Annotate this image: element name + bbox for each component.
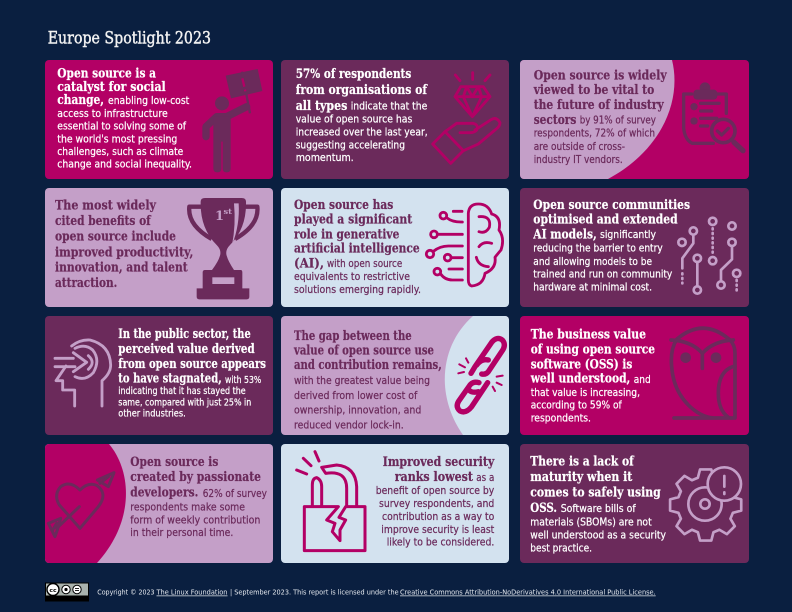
text block (296, 66, 428, 164)
text block: attraction. (55, 275, 117, 290)
icon: Creative Commons badge: cc (49, 588, 57, 594)
text block: Open source is a (57, 66, 156, 81)
panel background (281, 444, 509, 563)
text block: In the public sector, the (118, 326, 251, 341)
panel: contribution gap (281, 316, 509, 435)
text block: change and social inequality. (57, 159, 192, 171)
text block: with the greatest value being (294, 375, 430, 387)
text block (530, 326, 655, 424)
icon: gear with warning (670, 467, 741, 541)
text block: ranks lowest (395, 469, 473, 484)
text block: in their personal time. (130, 527, 233, 539)
text block: software (OSS) is (531, 356, 632, 371)
text block: to have stagnated, (118, 371, 222, 386)
title: Europe Spotlight 2023 (48, 28, 211, 48)
text block: derived from lower cost of (294, 390, 418, 402)
text block: indicate that the (351, 101, 427, 113)
text block: catalyst for social (57, 79, 166, 94)
text block: the world's most pressing (57, 134, 177, 146)
text block: contribution as a way to (382, 511, 494, 523)
panel background (45, 316, 273, 435)
text block (55, 197, 193, 290)
text block: optimised and extended (533, 212, 678, 227)
text block: change, (57, 92, 104, 107)
text block: cited benefits of (55, 213, 152, 228)
text block: essential to solving some of (57, 121, 186, 133)
icon: circuit traces (678, 218, 740, 294)
text block: from open source appears (118, 356, 266, 371)
text block: access to infrastructure (57, 108, 168, 120)
text block: The business value (531, 326, 646, 341)
text block: value of open source has (296, 114, 412, 126)
text block: There is a lack of (530, 454, 635, 469)
text block: Software bills of (561, 503, 636, 515)
copyright text: The Linux Foundation (156, 588, 228, 596)
text block: AI models, (532, 226, 597, 241)
icon: broken chain (457, 338, 504, 412)
text block: Open source is widely (534, 67, 667, 82)
text block: viewed to be vital to (533, 82, 654, 97)
text block: ownership, innovation, and (294, 405, 421, 417)
icon: owl (671, 328, 735, 418)
text block: as a (476, 472, 494, 484)
text block: reducing the barrier to entry (533, 243, 663, 255)
text block: sectors (534, 112, 576, 127)
icon: hand holding diamond (433, 73, 500, 163)
text block: well understood, (530, 371, 630, 386)
panel background (45, 188, 273, 307)
text block: form of weekly contribution (130, 514, 260, 526)
text block: industry IT vendors. (534, 154, 623, 166)
icon: trophy (189, 198, 257, 299)
panel: generative AI (281, 188, 509, 307)
panel background (45, 60, 273, 179)
text block: with 53% (225, 375, 261, 386)
panel: passionate developers (45, 444, 273, 563)
panel: social change (45, 60, 273, 179)
text block: from organisations of (296, 82, 428, 97)
footer (45, 582, 656, 602)
text block: artificial intelligence (294, 241, 420, 256)
text block: Open source has (294, 197, 393, 212)
icon: clipboard and magnifier (684, 84, 743, 151)
text block: respondents. (531, 412, 591, 424)
text block (533, 67, 667, 166)
text block: Improved security (383, 454, 495, 469)
text block (294, 197, 421, 296)
text block: momentum. (296, 152, 354, 164)
text block (530, 454, 666, 555)
text block: equivalents to restrictive (294, 271, 410, 283)
text block: hardware at minimal cost. (533, 282, 652, 294)
panel background (45, 444, 273, 563)
text block: innovation, and talent (55, 260, 188, 275)
text block: materials (SBOMs) are not (530, 517, 652, 529)
text block: other industries. (118, 409, 186, 420)
text block: and contribution remains, (294, 357, 442, 372)
text block: benefit of open source by (376, 485, 494, 497)
text block (376, 454, 495, 549)
icon: trophy: 1 (215, 209, 224, 224)
text block: of using open source (531, 341, 655, 356)
panel background (281, 60, 509, 179)
text block: best practice. (530, 543, 592, 555)
text block: survey respondents, and (379, 498, 494, 510)
panel background (520, 444, 749, 563)
icon: trophy: st (224, 207, 233, 216)
text block: 57% of respondents (296, 66, 411, 81)
text block: open source include (55, 228, 176, 243)
text block (57, 66, 192, 171)
panel background (520, 60, 749, 179)
icon: circuit brain (426, 204, 503, 286)
panel background (520, 316, 749, 435)
panel: business value (520, 316, 749, 435)
panel: most widely cited benefits (45, 188, 273, 307)
panel background (281, 316, 509, 435)
text block: The gap between the (294, 328, 412, 343)
text block: are outside of cross- (534, 141, 625, 153)
copyright text (97, 588, 656, 596)
text block: with open source (327, 258, 402, 270)
text block: well understood as a security (530, 530, 666, 542)
icon: head with target (55, 340, 111, 406)
icon: protester with sign (206, 69, 262, 172)
text block: increased over the last year, (296, 127, 428, 139)
text block: created by passionate (130, 469, 261, 484)
text block: indicating that it has stayed the (118, 386, 246, 397)
text block (130, 454, 267, 539)
text block: suggesting accelerating (296, 139, 405, 151)
icon: broken padlock (297, 452, 365, 551)
text block: trained and run on community (533, 269, 672, 281)
text block: 62% of survey (203, 488, 267, 500)
text block: respondents, 72% of which (534, 128, 655, 140)
magenta curved area (45, 444, 126, 563)
text block: Open source is (130, 454, 218, 469)
text block: perceived value derived (118, 341, 255, 356)
panel: improved security (281, 444, 509, 563)
text block: maturity when it (530, 469, 632, 484)
text block: Open source communities (533, 197, 690, 212)
text block: the future of industry (534, 97, 664, 112)
text block: developers. (130, 485, 198, 500)
copyright text: Copyright © 2023 (97, 588, 154, 596)
copyright text: | September 2023. This report is licensed under the (230, 588, 399, 596)
text block: respondents make some (130, 501, 245, 513)
text block: improve security is least (381, 524, 494, 536)
panel: lack of maturity (520, 444, 749, 563)
lilac curved area (520, 60, 674, 179)
text block: that value is increasing, (531, 387, 640, 399)
text block: likely to be considered. (387, 537, 494, 549)
text block (532, 197, 690, 294)
text block: The most widely (55, 197, 157, 212)
text block: solutions emerging rapidly. (294, 284, 421, 296)
text block (293, 328, 442, 432)
text block: challenges, such as climate (57, 146, 183, 158)
text block: and (634, 374, 651, 386)
text block: role in generative (294, 226, 399, 241)
text block: comes to safely using (530, 485, 661, 500)
text block: by 91% of survey (580, 115, 656, 127)
text block: reduced vendor lock-in. (294, 420, 404, 432)
text block: played a significant (294, 211, 412, 226)
text block: OSS. (530, 500, 557, 515)
text block: enabling low-cost (108, 95, 189, 107)
text block: improved productivity, (55, 244, 193, 259)
text block: significantly (600, 229, 656, 241)
text block: (AI), (294, 255, 324, 270)
panel: AI models communities (520, 188, 749, 307)
light blue curved area (445, 316, 509, 435)
panel: vital to industry sectors (520, 60, 749, 179)
text block: and allowing models to be (533, 256, 652, 268)
text block: value of open source use (293, 343, 434, 358)
text block: according to 59% of (531, 400, 622, 412)
panel background (281, 188, 509, 307)
panel: public sector (45, 316, 273, 435)
copyright text: Creative Commons Attribution-NoDerivatives 4.0 International Public License. (400, 588, 656, 596)
text block: all types (296, 98, 347, 113)
panel: 57% of respondents (281, 60, 509, 179)
icon: Creative Commons badge (45, 582, 89, 602)
text block: same, compared with just 25% in (118, 398, 251, 409)
icon: heart and arrow (48, 473, 114, 537)
panel background (520, 188, 749, 307)
text block (118, 326, 266, 420)
